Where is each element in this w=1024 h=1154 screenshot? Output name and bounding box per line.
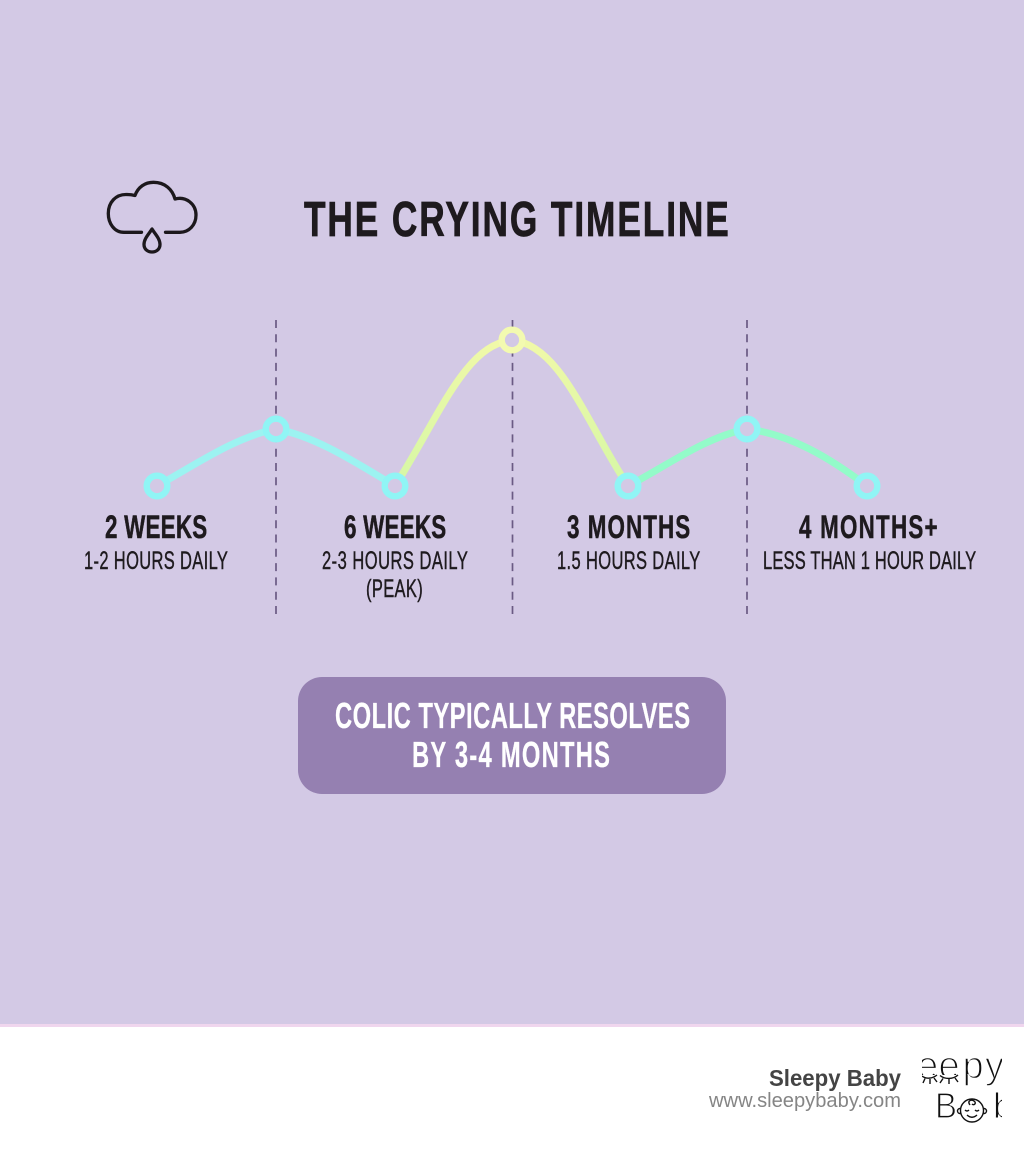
label: 6 weeks: (PEAK) (366, 576, 423, 603)
label: 4 months+: 4 MONTHS+ (799, 509, 938, 545)
curve: green segment, 3 to 4 months (628, 429, 867, 486)
label: 4 months+ (763, 509, 976, 575)
footer band (0, 1024, 1024, 1154)
icon: closed eye lashes (922, 1075, 958, 1084)
curve: blue segment, 2 to 6 weeks (157, 429, 395, 486)
label: 6 weeks: 2-3 HOURS DAILY (322, 548, 468, 575)
logo: Sleepy Baby (922, 1058, 1002, 1123)
curve: yellow segment falling from peak (512, 340, 628, 486)
label: 2 weeks: 1-2 HOURS DAILY (84, 548, 228, 575)
label: 6 weeks (322, 509, 468, 603)
footer brand name: Sleepy Baby (769, 1065, 901, 1091)
footer url: www.sleepybaby.com (708, 1090, 901, 1112)
callout: COLIC TYPICALLY RESOLVES (335, 696, 690, 736)
label: 3 months: 3 MONTHS (567, 509, 690, 545)
callout (298, 677, 726, 794)
label: 6 weeks: 6 WEEKS (344, 509, 446, 545)
icon: baby face (958, 1099, 986, 1122)
curve: yellow segment rising to peak (395, 340, 512, 486)
logo: Sleepy Baby: eepy (917, 1045, 1004, 1087)
label: 4 months+: LESS THAN 1 HOUR DAILY (763, 548, 976, 575)
label: 3 months (557, 509, 700, 575)
timeline chart (147, 320, 877, 614)
data point markers (147, 330, 877, 496)
callout: BY 3-4 MONTHS (412, 735, 610, 775)
icon: cloud with tear drop (108, 182, 196, 252)
label: 2 weeks (84, 509, 228, 575)
title: THE CRYING TIMELINE (304, 192, 729, 247)
logo: Sleepy Baby: B (935, 1085, 957, 1126)
label: 3 months: 1.5 HOURS DAILY (557, 548, 700, 575)
label: 2 weeks: 2 WEEKS (105, 509, 207, 545)
logo: Sleepy Baby: b (993, 1085, 1013, 1126)
